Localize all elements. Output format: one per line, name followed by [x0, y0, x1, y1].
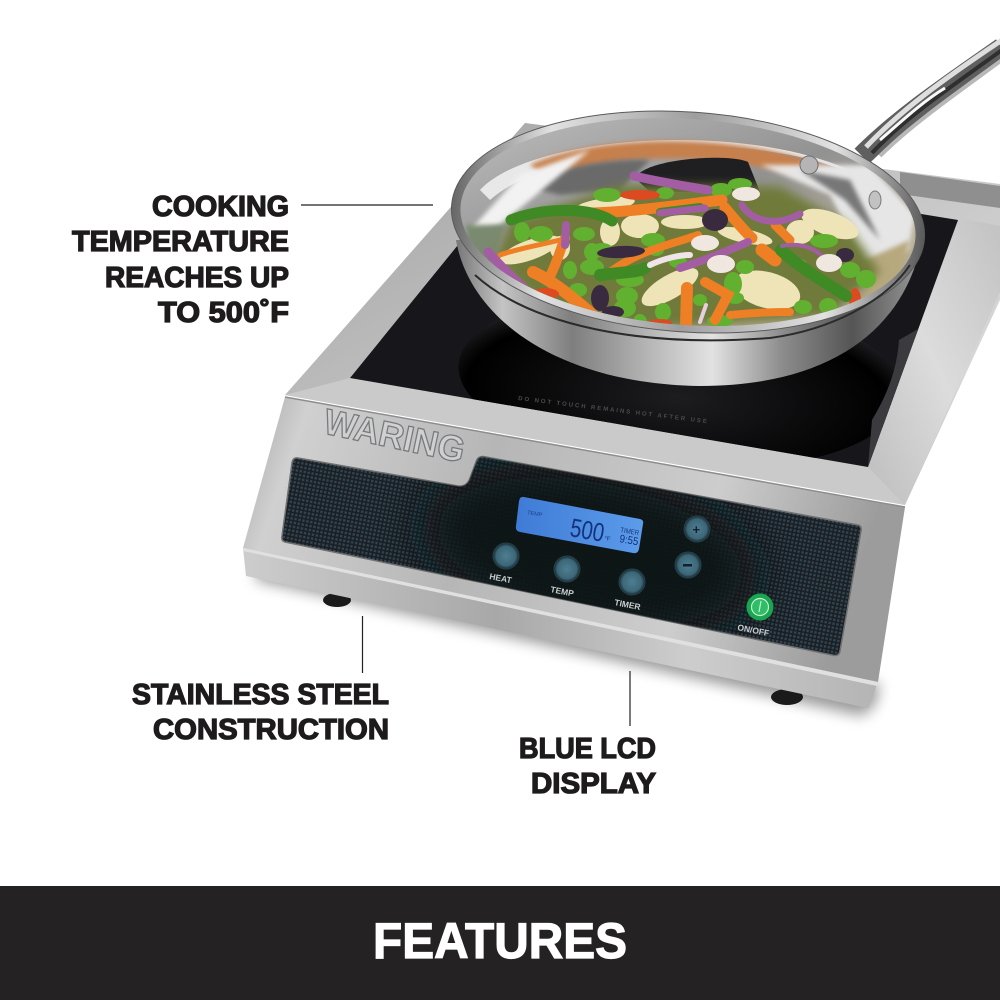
callout: cooking temperature: REACHES UP [105, 262, 289, 294]
center dark fade [400, 456, 780, 638]
mushroom white beans [691, 187, 842, 273]
leader line [362, 616, 364, 673]
leader line [629, 671, 631, 726]
lip highlight [243, 548, 878, 686]
label text: BLUE LCD [519, 733, 656, 765]
front rim dark line [475, 265, 910, 340]
red peppers [531, 190, 861, 327]
button: plus [684, 516, 710, 542]
bevel seam [285, 397, 905, 507]
button: on off: ON/OFF [737, 622, 770, 638]
interior reflections and food [465, 140, 915, 330]
purple onion [488, 176, 822, 322]
edamame [514, 178, 876, 330]
callout: stainless steel [132, 616, 389, 746]
button: plus: + [692, 522, 700, 537]
top wall light band [480, 140, 844, 200]
burner ring reflection [458, 324, 918, 466]
footer heading: FEATURES [373, 913, 627, 969]
warning text: DO NOT TOUCH REMAINS HOT AFTER USE [518, 396, 707, 425]
lcd unit: °F [604, 536, 611, 543]
glass cooking surface [350, 214, 958, 467]
callout: cooking temperature [72, 191, 433, 329]
front panel face [243, 397, 905, 682]
lcd temp label: TEMP [527, 510, 543, 519]
lcd timer label: TIMER [620, 527, 640, 537]
dark purple carrot slices [591, 209, 854, 318]
leader line [301, 204, 433, 206]
callout: cooking temperature: TO 500˚F [158, 297, 289, 329]
lower lip [243, 548, 878, 708]
pan outer body [456, 240, 922, 386]
food base [495, 185, 880, 330]
lcd temperature reading: 500 [568, 512, 607, 548]
back edge strip [900, 172, 1000, 208]
cream vegetables [500, 196, 858, 308]
label text: COOKING [152, 191, 289, 223]
control panel [281, 456, 862, 656]
footer band [0, 886, 1000, 1000]
button: heat [489, 543, 519, 585]
lcd display [516, 497, 643, 553]
carrots [500, 200, 790, 326]
icon: left foot [323, 593, 351, 607]
induction cooktop [243, 123, 1000, 708]
button: temp [550, 556, 580, 599]
button: minus [675, 552, 701, 578]
pan handle [862, 40, 1000, 156]
dark wall reflection [635, 158, 760, 192]
white reflections [760, 165, 915, 265]
waring logo: WARING [320, 401, 469, 471]
button: temp: TEMP [550, 584, 575, 599]
callout: stainless steel: CONSTRUCTION [153, 714, 389, 746]
callout: blue lcd display [519, 671, 656, 800]
icon: right foot [771, 689, 803, 705]
lcd timer reading: 9:55 [618, 533, 639, 548]
pan interior [453, 103, 923, 341]
callout: blue lcd display: DISPLAY [531, 768, 656, 800]
pan rivet lower [869, 191, 881, 209]
button: timer [614, 569, 645, 612]
callout: cooking temperature: TEMPERATURE [72, 226, 289, 258]
button: on off [737, 594, 774, 638]
label text: STAINLESS STEEL [132, 679, 389, 711]
back right top edge [285, 123, 1000, 505]
frying pan with vegetables [444, 40, 1000, 386]
front bevel [285, 378, 905, 505]
pan rivet upper [800, 156, 818, 174]
orange wall reflection [528, 138, 831, 173]
cooktop shadow [255, 560, 880, 716]
pan rim [444, 96, 932, 348]
button: heat: HEAT [489, 571, 513, 585]
pods [511, 207, 846, 296]
button: timer: TIMER [614, 597, 641, 612]
right metal rail [868, 218, 1000, 505]
